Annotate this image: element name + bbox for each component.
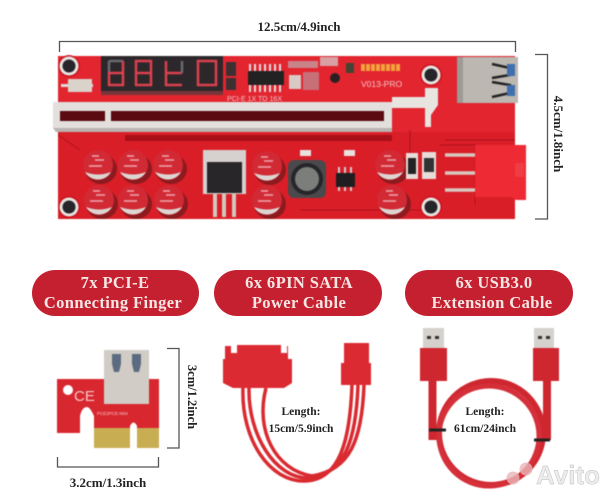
- SATA cable length label: 15cm/5.9inch: [269, 423, 334, 435]
- heading pill: USB: [405, 270, 573, 316]
- right height bracket: [535, 54, 548, 219]
- board model label: V013-PRO: [361, 79, 402, 89]
- USB extension cable: [420, 328, 559, 486]
- power diode and fuse: [406, 152, 436, 179]
- connecting finger card: CE: [74, 388, 95, 405]
- capacitors: [83, 150, 411, 219]
- heading pill: SATA: [214, 270, 382, 316]
- red power connector: [475, 145, 526, 200]
- heading pill: USB: 6x USB3.0: [456, 273, 532, 292]
- driver chip: [248, 64, 284, 92]
- SATA connector: [223, 345, 292, 388]
- SATA cable length label: Length:: [282, 406, 320, 418]
- small component cluster: [288, 57, 354, 90]
- USB cable length label: [454, 406, 517, 435]
- small diodes: [300, 150, 355, 156]
- board slot label: PCI-E 1X TO 16X: [227, 96, 282, 103]
- top width dimension label: 12.5cm/4.9inch: [257, 19, 341, 34]
- board base: [58, 56, 515, 219]
- small connectors: [226, 62, 236, 90]
- card height label: 3cm/1.2inch: [185, 365, 199, 429]
- inductor: [288, 160, 326, 198]
- LED row: [361, 64, 400, 71]
- 6-pin pins: [445, 155, 476, 190]
- SATA power cable: [223, 343, 371, 481]
- heading pill: USB: Extension Cable: [431, 293, 553, 312]
- watermark: Avito: [536, 460, 600, 490]
- voltage regulator: [203, 150, 246, 217]
- push button: [61, 79, 93, 92]
- control chip: [336, 167, 355, 191]
- right USB plug: [533, 328, 559, 381]
- heading pill: SATA: 6x 6PIN SATA: [245, 273, 353, 292]
- left USB plug: [420, 328, 447, 381]
- 6-pin connector: [341, 343, 371, 385]
- card width bracket: [58, 457, 158, 467]
- connecting finger card: [57, 350, 159, 448]
- PCI-E slot: [53, 102, 392, 132]
- SATA cable length label: [269, 406, 334, 435]
- right height dimension label: 4.5cm/1.8inch: [551, 96, 566, 173]
- seven segment display: [101, 56, 223, 95]
- USB 3.0 port: [457, 57, 518, 103]
- heading pill: PCI-E: Connecting Finger: [44, 293, 182, 312]
- card height bracket: [167, 348, 179, 448]
- top width bracket: [60, 42, 516, 52]
- mounting holes: [58, 55, 442, 218]
- connecting finger card: PCE2PCE-N04: [97, 411, 128, 416]
- watermark: [506, 460, 600, 490]
- riser circuit board: [53, 55, 526, 219]
- heading pill: SATA: Power Cable: [252, 293, 346, 312]
- USB cable length label: Length:: [466, 406, 504, 418]
- card width label: 3.2cm/1.3inch: [70, 475, 147, 490]
- USB cable length label: 61cm/24inch: [454, 423, 517, 435]
- heading pill: PCI-E: [32, 270, 199, 316]
- heading pill: PCI-E: 7x PCI-E: [81, 273, 149, 292]
- slot retention clip: [392, 88, 438, 127]
